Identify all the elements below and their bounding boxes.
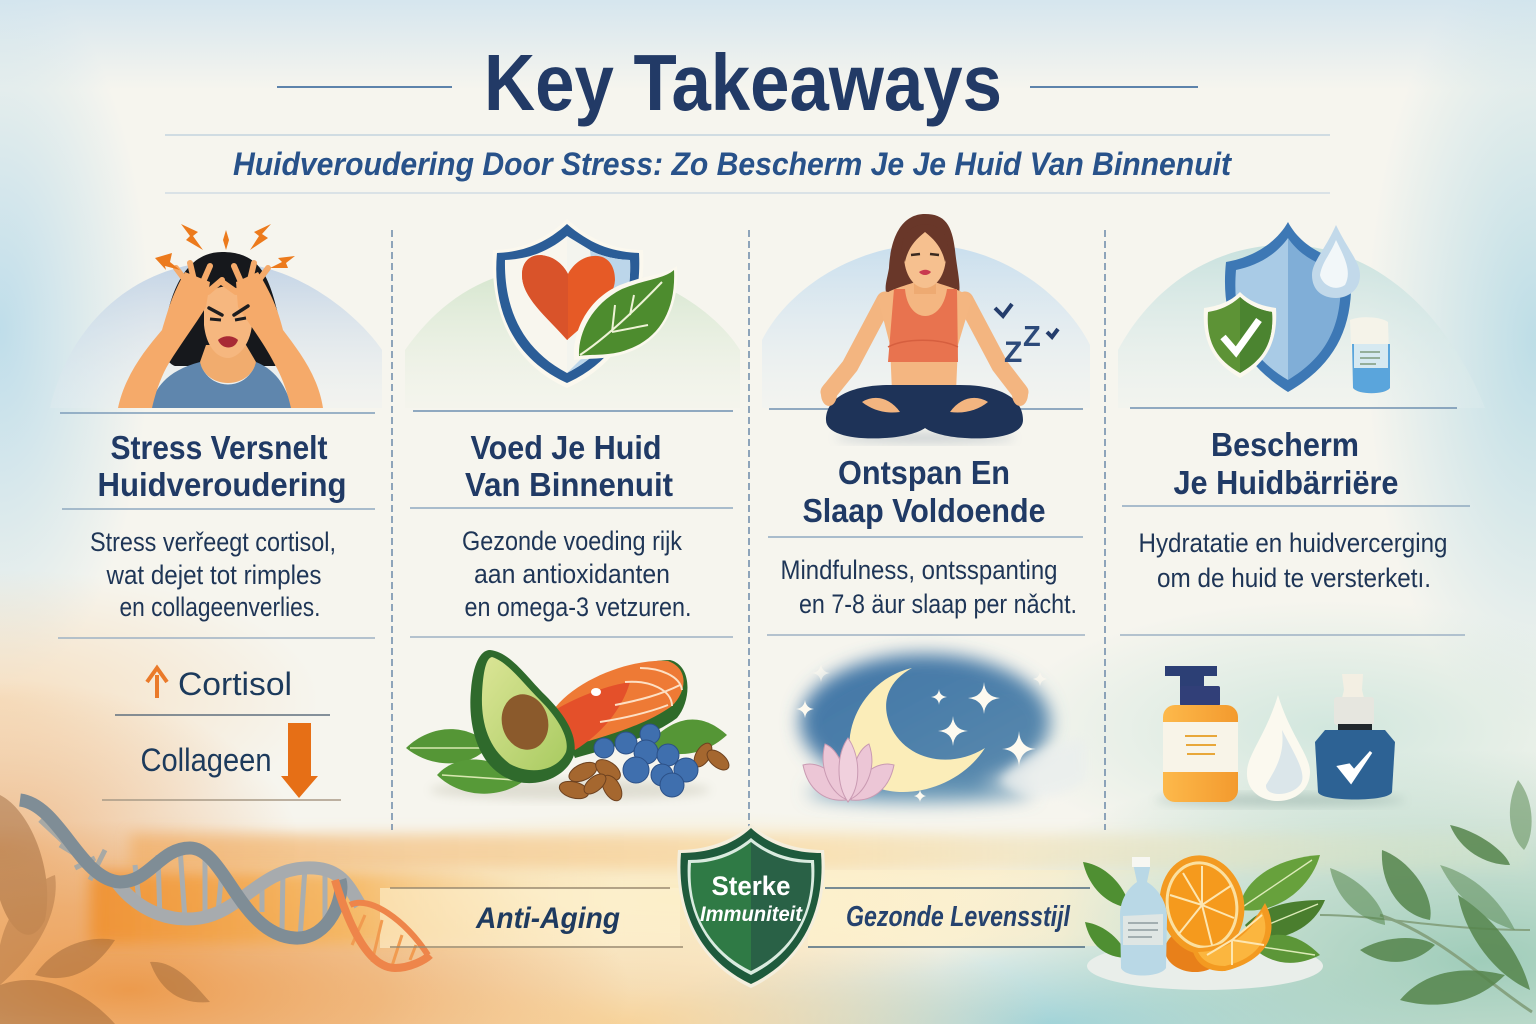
heading: stress: Huidveroudering <box>98 466 346 503</box>
body text: relax: Mindfulness, ontsspanting <box>780 555 1058 585</box>
heading: stress <box>98 429 346 503</box>
body text: nutrition <box>462 526 692 622</box>
body text: relax: en 7-8 äur slaap per nǎcht. <box>799 589 1077 619</box>
arch backdrop: barrier <box>1118 245 1485 408</box>
heading: nutrition: Voed Je Huid <box>470 429 662 466</box>
subtitle: Huidveroudering Door Stress: Zo Bescherm Je Je Huid Van Binnenuit <box>233 146 1232 182</box>
badge: sterke immuniteit shield: Immuniteit <box>700 903 803 926</box>
heading: barrier: Je Huidbärriëre <box>1174 464 1398 501</box>
body text: barrier <box>1138 528 1448 593</box>
panel: stress <box>50 224 382 800</box>
body text: stress: en collageenverlies. <box>120 592 320 622</box>
cortisol up: Cortisol <box>178 666 292 702</box>
icon: moon, stars and lotus <box>796 654 1085 802</box>
badge: sterke immuniteit shield <box>677 824 825 988</box>
heading: stress: Stress Versnelt <box>110 429 328 466</box>
arch backdrop: nutrition <box>405 265 740 408</box>
arch backdrop: stress <box>50 262 382 408</box>
heading: nutrition <box>465 429 673 503</box>
icon: heart shield with leaf <box>493 219 677 388</box>
icon: skincare products <box>1155 666 1405 806</box>
body text: stress <box>90 527 336 622</box>
label: gezonde levensstijl: Gezonde Levensstijl <box>846 901 1071 933</box>
label: anti-aging: Anti-Aging <box>475 902 620 935</box>
body text: relax <box>780 555 1077 619</box>
body text: barrier: om de huid te versterketı. <box>1157 563 1431 593</box>
body text: nutrition: aan antioxidanten <box>474 559 670 589</box>
panel: nutrition <box>405 219 740 804</box>
decoration: brown leaves bottom left <box>0 795 210 1024</box>
heading: barrier <box>1174 426 1398 501</box>
bottom ribbon band <box>90 834 1530 948</box>
arch backdrop: relax <box>762 245 1090 408</box>
body text: nutrition: Gezonde voeding rijk <box>462 526 682 556</box>
title: Key Takeaways <box>484 38 1002 127</box>
collageen down: Collageen <box>140 742 272 778</box>
body text: stress: Stress verřeegt cortisol, <box>90 527 336 557</box>
badge: sterke immuniteit shield: Sterke <box>712 871 790 901</box>
heading: relax <box>802 454 1046 529</box>
heading: relax: Ontspan En <box>838 454 1010 491</box>
body text: stress: wat dejet tot rimples <box>106 560 321 590</box>
icon: sleep z letters <box>995 304 1058 369</box>
icon: DNA helix <box>20 800 430 968</box>
icon: healthy food <box>406 650 732 804</box>
body text: nutrition: en omega-3 vetzuren. <box>464 592 692 622</box>
body text: barrier: Hydratatie en huidvercerging <box>1138 528 1448 558</box>
icon: sleep z letters: Z <box>1004 336 1022 369</box>
collageen down <box>140 723 318 798</box>
panel: relax <box>762 214 1090 802</box>
icon: shields, drop and serum <box>1204 222 1390 394</box>
icon: stressed woman <box>118 224 323 408</box>
panel: skin barrier <box>1118 222 1485 806</box>
icon: sleep z letters: Z <box>1023 321 1041 353</box>
icon: water bottle, oranges and leaves <box>1083 847 1325 990</box>
heading: relax: Slaap Voldoende <box>802 492 1046 529</box>
decoration: green leaves bottom right <box>1320 780 1532 1012</box>
heading: nutrition: Van Binnenuit <box>465 466 673 503</box>
heading: barrier: Bescherm <box>1211 426 1359 463</box>
icon: meditating woman <box>821 214 1028 443</box>
